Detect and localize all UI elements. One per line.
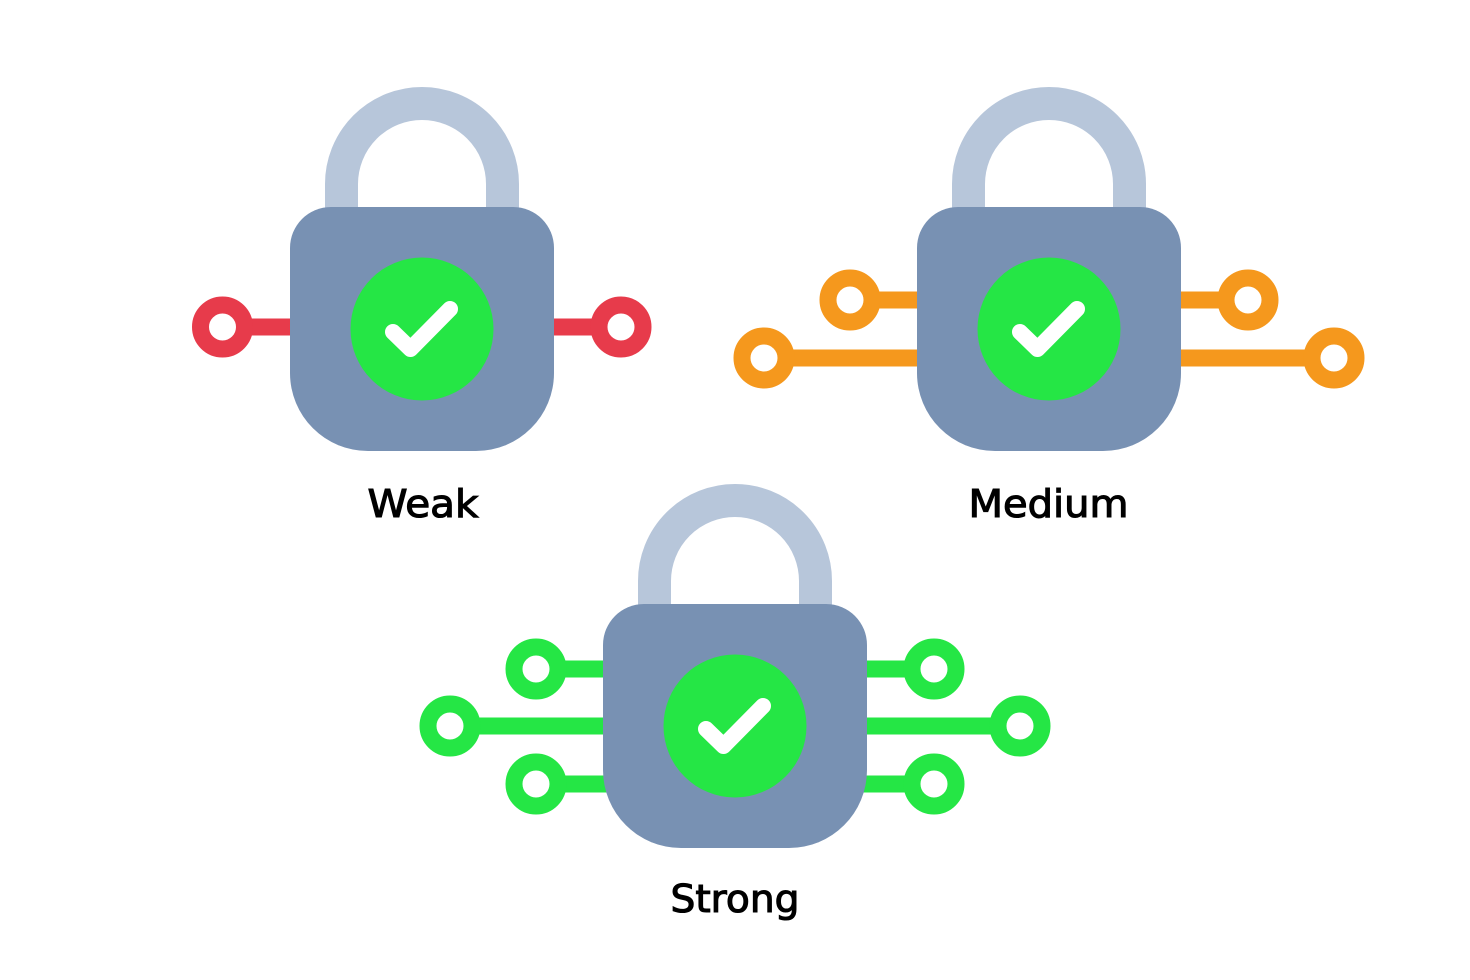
label: medium: Medium xyxy=(968,482,1128,526)
icon: weak padlock body xyxy=(290,207,554,451)
circuit: medium orange connectors xyxy=(742,278,1356,380)
icon: strong padlock body xyxy=(603,604,867,848)
icon: medium padlock body xyxy=(917,207,1181,451)
icon: strong check badge xyxy=(664,654,806,798)
circuit: strong green connectors xyxy=(428,647,1042,806)
icon: strong padlock shackle xyxy=(654,500,816,612)
icon: medium padlock shackle xyxy=(968,104,1130,215)
icon: medium check badge xyxy=(978,258,1120,400)
panel: medium lock xyxy=(742,104,1356,526)
panel: strong lock xyxy=(428,500,1042,921)
circuit: weak red connectors xyxy=(200,305,643,349)
icon: weak padlock shackle xyxy=(342,104,502,215)
label: weak: Weak xyxy=(368,482,478,526)
label: strong: Strong xyxy=(670,877,800,921)
panel: weak lock xyxy=(200,104,643,526)
icon: weak check badge xyxy=(350,258,494,400)
